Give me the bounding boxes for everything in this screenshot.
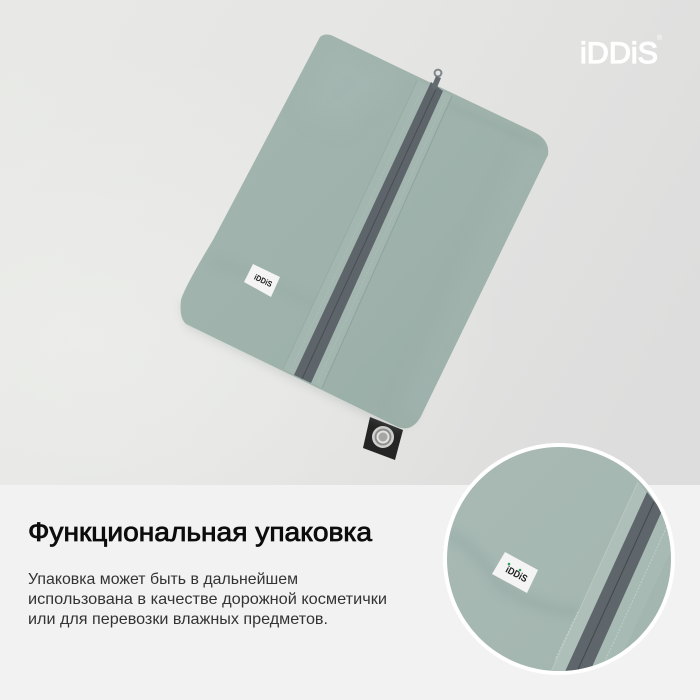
circle label: iDDiS bbox=[503, 565, 529, 585]
description: использована в качестве дорожной косметички bbox=[28, 591, 387, 608]
description bbox=[28, 571, 387, 628]
bag label bbox=[244, 264, 280, 297]
brand logo: ® bbox=[657, 34, 663, 42]
circle label bbox=[492, 552, 538, 593]
zipper pull bbox=[431, 70, 441, 90]
fabric fold shading bbox=[456, 538, 507, 588]
icon: hanging tab with grommet bbox=[363, 417, 403, 460]
bag label: iDDiS bbox=[253, 273, 274, 289]
zipper tape bbox=[563, 492, 662, 676]
brand logo: iDDiS bbox=[580, 37, 658, 70]
zipper flap bbox=[283, 81, 452, 388]
text block bbox=[28, 517, 387, 628]
product: cosmetic bag bbox=[180, 34, 560, 430]
description: или для перевозки влажных предметов. bbox=[28, 611, 328, 628]
title: Функциональная упаковка bbox=[28, 517, 373, 547]
bottom panel bbox=[0, 485, 700, 700]
right zipper flap bbox=[592, 513, 671, 666]
photo background bbox=[0, 0, 700, 486]
detail circle: zoomed fabric, zipper and label bbox=[440, 440, 680, 680]
description: Упаковка может быть в дальнейшем bbox=[28, 571, 298, 588]
left zipper flap bbox=[549, 482, 648, 676]
zipper tape bbox=[294, 82, 443, 383]
